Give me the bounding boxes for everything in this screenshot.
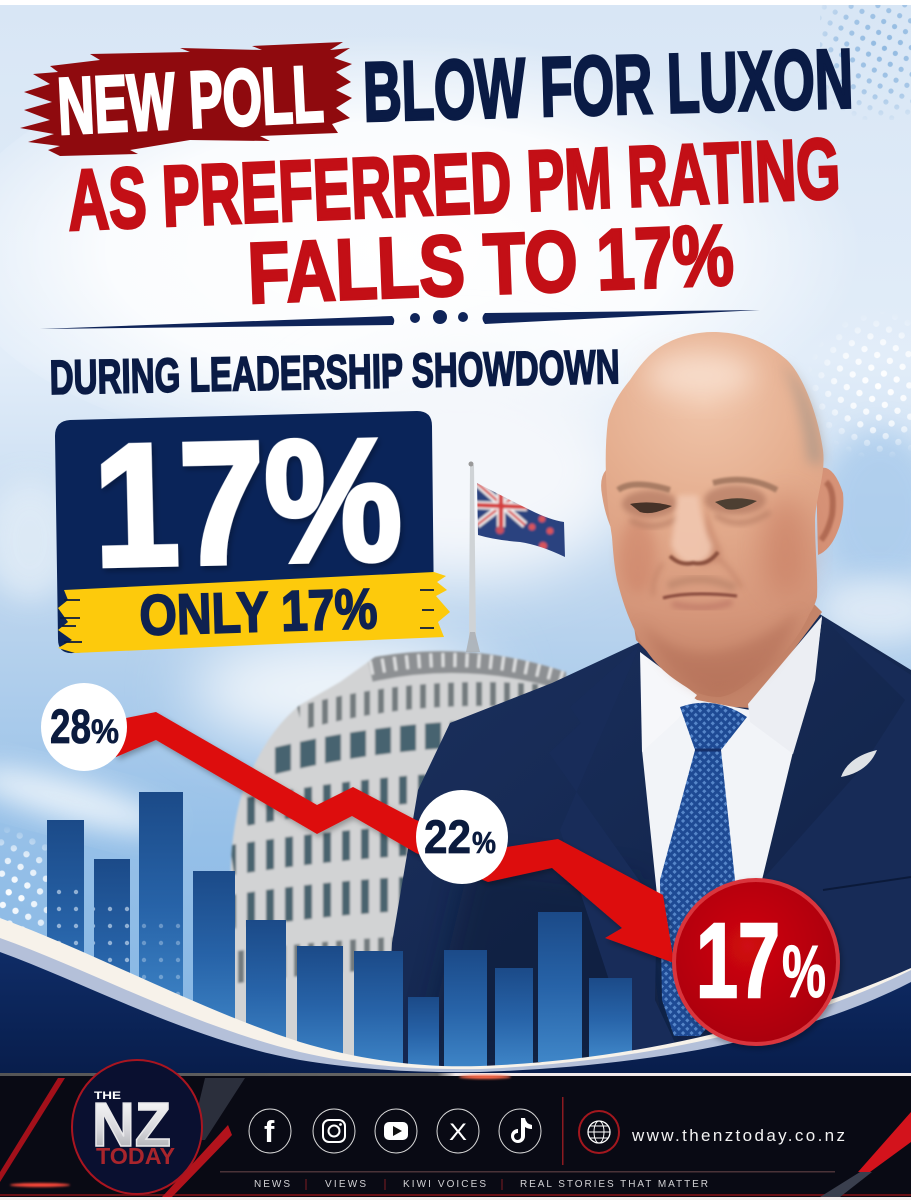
title line: NEW POLL: NEW POLL <box>55 49 326 151</box>
footer navigation labels: REAL STORIES THAT MATTER <box>520 1179 708 1190</box>
logo: The NZ Today: THE <box>94 1090 121 1102</box>
lower lip <box>672 602 732 608</box>
suit jacket <box>385 613 911 1075</box>
right ear <box>816 468 843 555</box>
data point: 17% red badge <box>672 878 840 1046</box>
bar chart <box>47 792 632 1072</box>
social icon: X: X <box>449 1119 467 1146</box>
jaw shading <box>640 610 800 695</box>
nose underside <box>670 552 718 564</box>
social icon: Instagram <box>313 1109 355 1153</box>
footer navigation labels: VIEWS <box>325 1179 366 1190</box>
social icon: TikTok <box>499 1109 541 1153</box>
logo: The NZ Today <box>72 1060 202 1194</box>
tie knot shadow <box>695 748 721 752</box>
footer navigation labels: KIWI VOICES <box>403 1179 486 1190</box>
data point: 22%: 22 <box>424 810 471 863</box>
logo: The NZ Today: TODAY <box>96 1143 175 1169</box>
right under-eye bag <box>715 512 770 523</box>
eyebrows <box>618 480 777 490</box>
nose shadow <box>700 505 722 566</box>
nasolabial folds <box>653 560 742 596</box>
ornamental divider <box>40 310 760 329</box>
forehead highlight <box>645 353 755 397</box>
suit lower shadow <box>420 860 670 1075</box>
data point: 28% <box>41 683 127 771</box>
photo: Beehive parliament building <box>230 650 568 1056</box>
right lapel <box>735 616 911 1075</box>
photo: Christopher Luxon in a suit <box>385 332 911 1075</box>
callout: 17% box: ONLY 17% <box>138 577 378 648</box>
footer bar <box>0 1073 911 1200</box>
left under-eye bag <box>630 518 678 526</box>
data point: 22%: % <box>472 825 496 860</box>
white shirt <box>642 618 822 895</box>
left collar <box>640 652 697 752</box>
social icon: Facebook <box>249 1109 291 1153</box>
photo: flagpole and New Zealand flag <box>466 462 570 652</box>
decorative right slash <box>858 1112 911 1172</box>
dark brush streaks <box>60 590 434 642</box>
right eye socket <box>704 485 766 515</box>
left ear <box>601 470 612 530</box>
side hair stubble <box>782 362 823 465</box>
footer navigation labels: NEWS <box>254 1179 290 1190</box>
footer navigation labels <box>254 1179 708 1190</box>
data point: 28%: 28 <box>50 701 91 754</box>
vertical divider <box>562 1097 564 1165</box>
logo: The NZ Today: NZ <box>92 1091 171 1160</box>
callout: 17% box: 17% <box>91 401 404 603</box>
title line: FALLS TO 17%: FALLS TO 17% <box>246 207 735 322</box>
left eye <box>630 502 672 513</box>
upper lip area <box>668 579 735 588</box>
globe icon <box>579 1111 619 1153</box>
red falling trend arrow <box>116 712 674 963</box>
lapel pin: silver fern <box>841 750 877 777</box>
website address: www.thenztoday.co.nz <box>631 1126 845 1145</box>
head <box>606 332 824 697</box>
mouth <box>663 594 737 598</box>
social icon: YouTube <box>375 1109 417 1153</box>
left lapel <box>549 645 690 1075</box>
cheek redness right <box>761 495 809 595</box>
horizontal rule <box>220 1171 835 1172</box>
data point: 17% red badge: 17 <box>696 902 780 1020</box>
data point: 17% red badge: % <box>782 930 826 1013</box>
left eye socket <box>622 490 678 518</box>
nose bridge highlight <box>671 495 712 563</box>
subheading: DURING LEADERSHIP SHOWDOWN <box>49 341 620 405</box>
cheek redness left <box>620 517 656 593</box>
social icon: Facebook: f <box>264 1114 275 1149</box>
social icon: X <box>437 1109 479 1153</box>
tie <box>660 703 747 1036</box>
neck <box>630 590 822 708</box>
data point: 22% <box>416 790 508 884</box>
yellow brush band <box>58 572 450 653</box>
right eye <box>715 498 757 510</box>
decorative left slash <box>0 1078 65 1182</box>
brush stroke behind NEW POLL <box>20 42 352 156</box>
curved navy swoosh <box>0 918 911 1076</box>
right collar <box>748 616 822 754</box>
data point: 28%: % <box>91 713 119 751</box>
